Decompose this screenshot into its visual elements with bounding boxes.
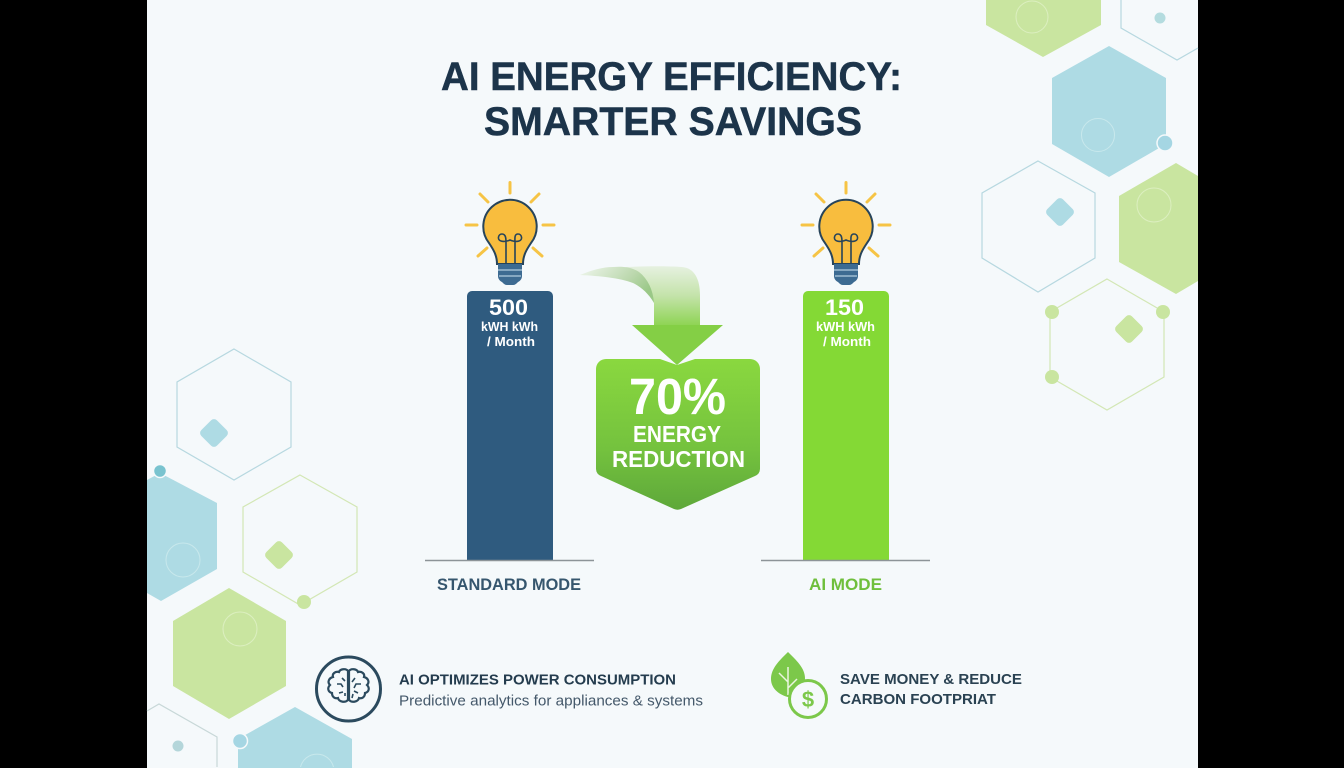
bar value: 500: / Month xyxy=(487,334,535,349)
bar value: 500: 500 xyxy=(489,295,528,320)
callout: 70% energy reduction badge: REDUCTION xyxy=(612,446,745,472)
callout: 70% energy reduction badge: ENERGY xyxy=(633,421,721,447)
icon: light bulb, standard mode xyxy=(466,182,554,285)
text: AI optimizes power consumption xyxy=(399,672,703,710)
text: AI optimizes power consumption: AI OPTIMIZES POWER CONSUMPTION xyxy=(399,672,676,688)
bar value: 150: kWH kWh xyxy=(816,319,875,334)
title: AI ENERGY EFFICIENCY: xyxy=(441,55,902,99)
callout: 70% energy reduction badge xyxy=(596,359,760,510)
icon: light bulb, AI mode xyxy=(802,182,890,285)
callout: 70% energy reduction badge: 70% xyxy=(629,368,726,425)
label: standard mode: STANDARD MODE xyxy=(437,576,581,594)
text: save money and reduce carbon footprint: CARBON FOOTPRIAT xyxy=(840,691,996,708)
arrow: curved down arrow xyxy=(580,266,723,365)
baseline: standard mode xyxy=(425,560,594,562)
bar: AI mode 150 kWh xyxy=(803,291,889,561)
title: SMARTER SAVINGS xyxy=(484,100,862,144)
text: save money and reduce carbon footprint xyxy=(840,671,1022,708)
icon: brain in circle xyxy=(316,657,380,721)
baseline: AI mode xyxy=(761,560,930,562)
bar value: 150: 150 xyxy=(825,295,864,320)
bar value: 150: / Month xyxy=(823,334,871,349)
bar value: 150 xyxy=(816,295,875,349)
title xyxy=(441,55,902,144)
label: AI mode: AI MODE xyxy=(809,576,882,594)
text: save money and reduce carbon footprint: SAVE MONEY & REDUCE xyxy=(840,671,1022,688)
bar: standard mode 500 kWh xyxy=(467,291,553,561)
text: AI optimizes power consumption: Predictive analytics for appliances & systems xyxy=(399,692,703,710)
icon: leaf and dollar coin: $ xyxy=(802,687,814,712)
bar value: 500 xyxy=(481,295,538,349)
decorative hexagons: top right xyxy=(982,0,1198,410)
icon: leaf and dollar coin xyxy=(771,652,826,718)
decorative hexagons: bottom left xyxy=(147,349,357,768)
bar value: 500: kWH kWh xyxy=(481,319,538,334)
